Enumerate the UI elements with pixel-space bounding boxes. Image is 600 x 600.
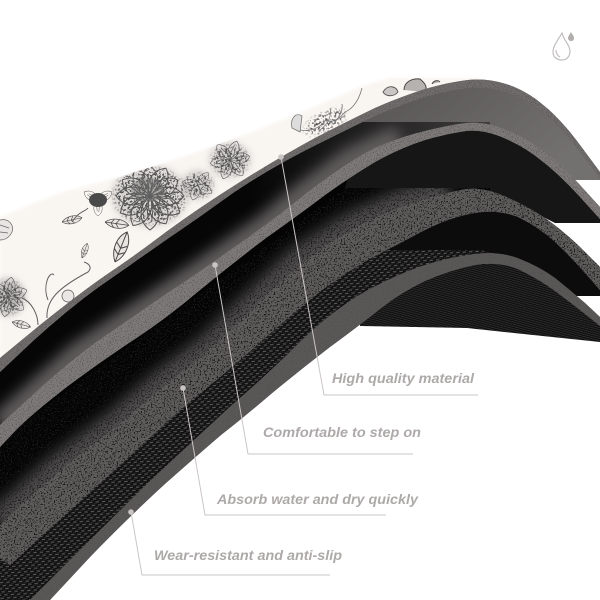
layer 1: high quality material band bbox=[0, 80, 600, 372]
left flower bbox=[0, 276, 29, 318]
layer 4: anti-slip band bbox=[30, 253, 600, 600]
small dark rosebud bbox=[84, 190, 112, 216]
right side petals bbox=[292, 115, 302, 132]
callout: wear-resistant and anti-slip bbox=[128, 509, 342, 575]
callout: comfortable to step on: Comfortable to step on bbox=[263, 424, 421, 440]
layer 2: comfortable foam band bbox=[0, 123, 600, 447]
leaves bbox=[62, 215, 82, 224]
layer 2: underside shadow bbox=[0, 125, 600, 540]
panel: printed floral top surface bbox=[0, 78, 480, 375]
floral print illustration bbox=[0, 79, 440, 330]
callout: absorb water and dry quickly bbox=[180, 385, 419, 515]
callout: high quality material bbox=[278, 154, 478, 395]
rose middle bbox=[182, 170, 214, 201]
rose right bbox=[209, 139, 251, 181]
layer 3: absorbent speckled band bbox=[0, 189, 600, 565]
icon: water drop bbox=[553, 32, 574, 60]
panel: top layer underside bbox=[0, 82, 600, 435]
stems bbox=[22, 208, 90, 325]
callout: high quality material: High quality material bbox=[332, 370, 475, 386]
callout: wear-resistant and anti-slip: Wear-resistant and anti-slip bbox=[154, 547, 342, 563]
callout: absorb water and dry quickly: Absorb water and dry quickly bbox=[216, 491, 419, 507]
peony bbox=[112, 164, 188, 230]
layer 3: mesh fabric bbox=[0, 250, 500, 600]
layer 3: underside shadow bbox=[380, 205, 600, 296]
partial bloom at left edge bbox=[0, 220, 12, 240]
callout: comfortable to step on bbox=[212, 262, 421, 454]
layer 4: bottom mesh bbox=[360, 258, 600, 342]
